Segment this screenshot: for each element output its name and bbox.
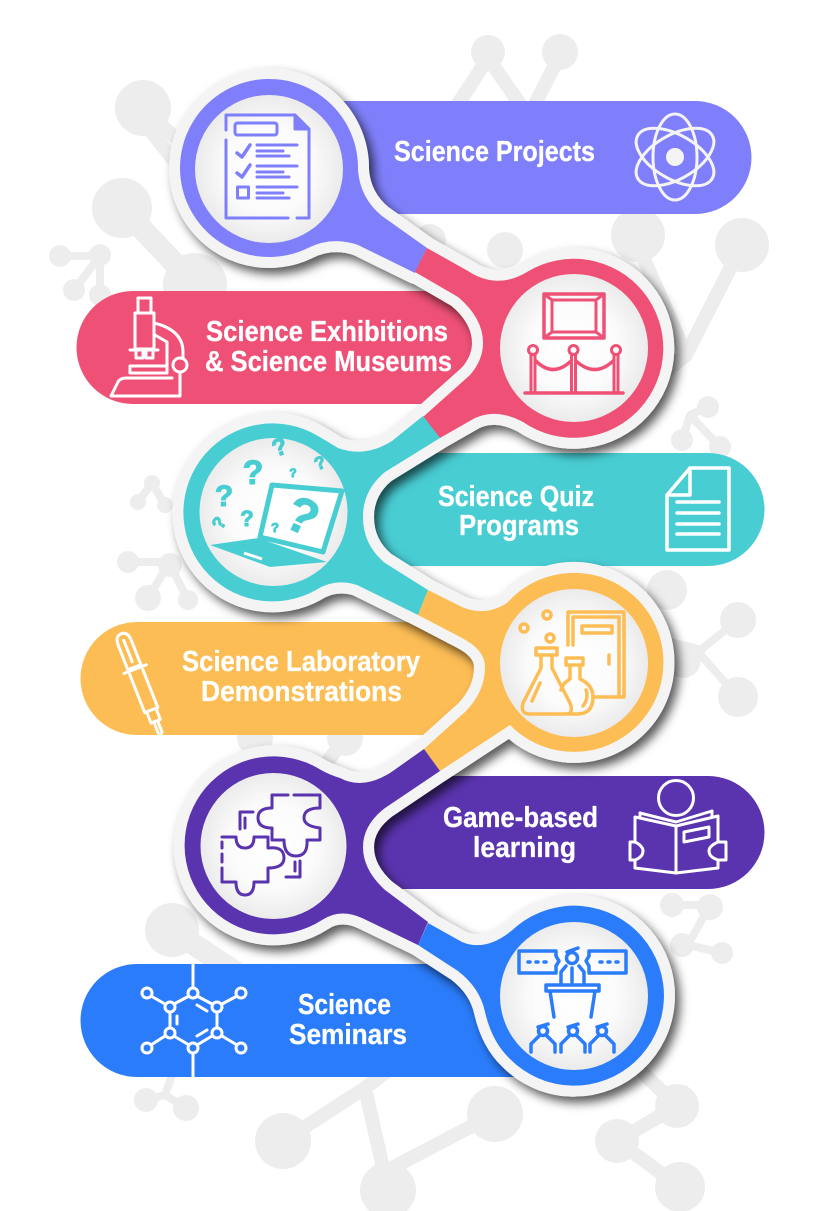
icon: laptop with question marks: ? <box>243 454 263 492</box>
icon: framed picture and rope barriers <box>525 294 623 393</box>
label: game-based learning: learning <box>473 832 576 864</box>
icon: document <box>667 468 729 550</box>
icon: laptop with question marks: ? <box>289 466 297 480</box>
icon: laptop with question marks: ? <box>277 484 328 548</box>
chain segment: orange magnifier <box>418 573 663 771</box>
label: science laboratory demonstrations <box>182 646 420 708</box>
chain segment: pink magnifier <box>415 248 663 438</box>
label: science exhibitions and museums: Science Exhibitions <box>206 316 448 348</box>
chain segment: purple magnifier <box>180 79 427 273</box>
icon: laptop with question marks: ? <box>240 506 254 531</box>
icon: laptop with question marks <box>208 432 342 567</box>
icon: hexagon molecule <box>142 964 246 1077</box>
icon: laptop with question marks: ? <box>311 452 329 474</box>
panel: game-based learning pill <box>350 776 764 889</box>
chain segment: blue magnifier <box>418 906 664 1086</box>
lens disc: laptop <box>200 438 348 586</box>
icon: laptop with question marks: ? <box>271 520 279 535</box>
label: science laboratory demonstrations: Science Laboratory <box>182 646 420 678</box>
label: science exhibitions and museums: & Science Museums <box>205 346 452 378</box>
icon: checklist document <box>226 115 309 218</box>
label: science seminars: Seminars <box>289 1019 407 1051</box>
lens disc: puzzle <box>200 773 346 919</box>
panel: science exhibitions pill <box>76 291 490 404</box>
icon: laptop with question marks: ? <box>215 480 233 513</box>
label: science quiz programs <box>438 481 594 542</box>
icon: puzzle pieces <box>222 795 320 895</box>
icon: atom <box>627 114 723 200</box>
chain segment: violet magnifier <box>185 749 440 945</box>
icon: pipette <box>110 629 172 739</box>
lens disc: seminar <box>500 922 648 1070</box>
icon: person reading book <box>630 780 726 873</box>
label: game-based learning: Game-based <box>443 802 598 834</box>
panel: science laboratory pill <box>80 622 490 735</box>
panel: science seminars pill <box>80 964 540 1077</box>
icon: speaker at podium with audience <box>519 948 626 1052</box>
icon: laptop with question marks: ? <box>208 513 230 533</box>
chain white outline with shadow <box>180 79 664 1086</box>
label: science quiz programs: Science Quiz <box>438 481 594 513</box>
lens disc: exhibit <box>500 274 648 422</box>
icon: laptop with question marks: ? <box>268 432 291 463</box>
label: science projects: Science Projects <box>394 136 595 168</box>
panel: science projects pill <box>330 101 751 214</box>
chain segment: teal magnifier <box>183 416 440 615</box>
label: science quiz programs: Programs <box>459 510 579 542</box>
panel: science quiz pill <box>350 453 764 566</box>
label: science seminars: Science <box>298 989 391 1021</box>
label: science exhibitions and museums <box>205 316 452 378</box>
icon: flasks and door <box>520 611 624 714</box>
icon: microscope <box>111 298 187 396</box>
label: science seminars <box>289 989 407 1051</box>
lens disc: flasks <box>500 589 648 737</box>
lens disc: checklist <box>195 95 343 243</box>
label: game-based learning <box>443 802 598 864</box>
label: science laboratory demonstrations: Demonstrations <box>201 676 402 708</box>
